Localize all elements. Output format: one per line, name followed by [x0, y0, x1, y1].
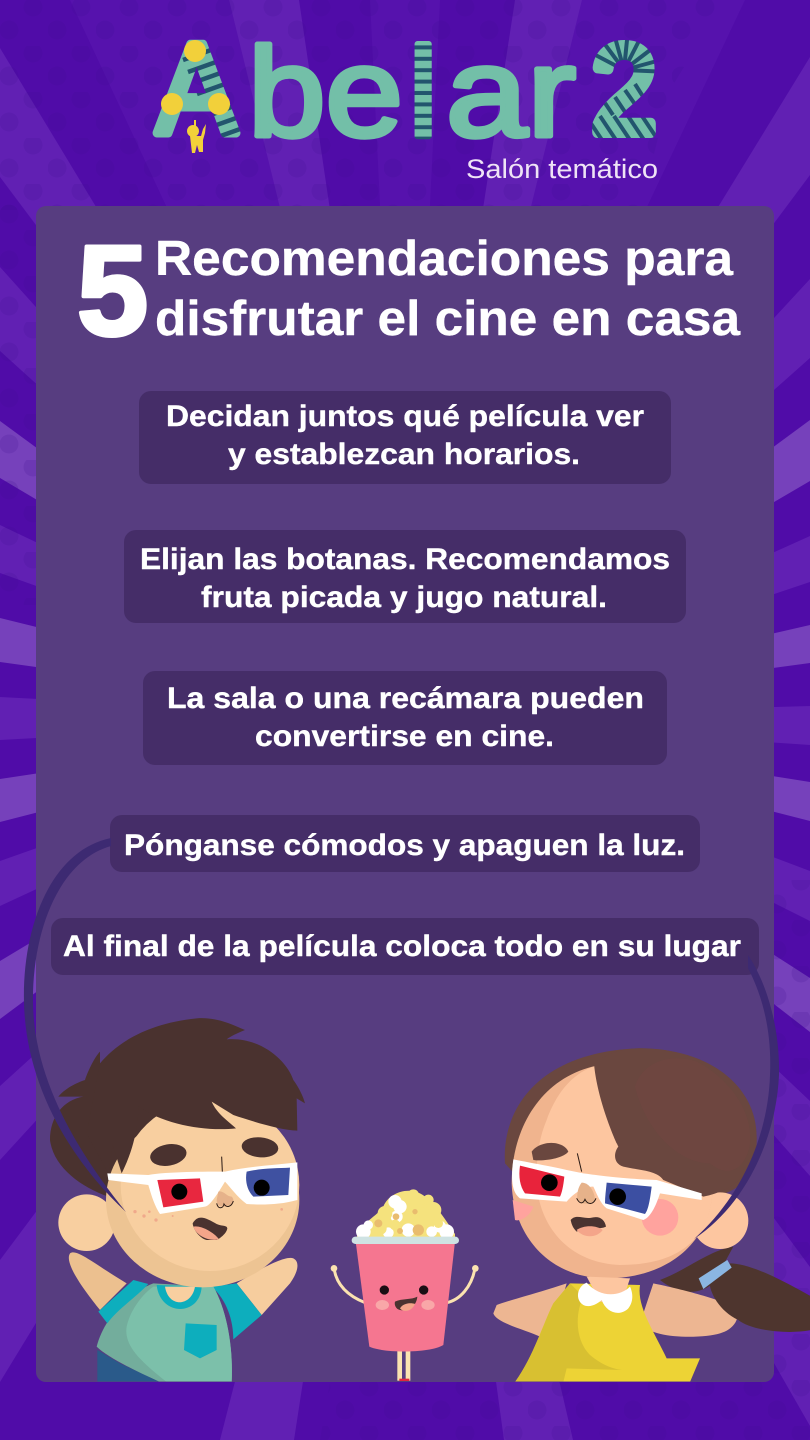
illustration: girl with 3D glasses [493, 1048, 810, 1382]
recommendation 2 [124, 530, 686, 623]
recommendation 1 [139, 391, 671, 484]
icon: yellow dots and hanging figure on the A [161, 40, 230, 153]
recommendation 1: y establezcan horarios. [228, 438, 580, 471]
left connector arc [24, 838, 126, 1212]
logo: Abelar 2 [156, 17, 658, 184]
logo striped letter l: l [409, 21, 437, 163]
title line 1: Recomendaciones para [155, 232, 734, 286]
recommendation 5: Al final de la película coloca todo en su lugar [63, 930, 741, 963]
recommendation 4: Pónganse cómodos y apaguen la luz. [124, 829, 685, 862]
panel: main card [36, 206, 774, 1382]
title [77, 220, 741, 363]
illustration: boy with 3D glasses [50, 1018, 305, 1382]
logo subtitle: Salón temático [466, 154, 658, 184]
recommendation 3 [143, 671, 667, 765]
recommendation 3: convertirse en cine. [255, 720, 554, 753]
logo letter A: A [156, 17, 236, 161]
big number 5: 5 [77, 220, 148, 363]
recommendation 1: Decidan juntos qué película ver [166, 400, 644, 433]
recommendation 2: fruta picada y jugo natural. [201, 581, 607, 614]
recommendation 5 [51, 918, 759, 975]
title line 2: disfrutar el cine en casa [155, 292, 741, 346]
illustration: popcorn bucket character [331, 1189, 479, 1381]
recommendation 2: Elijan las botanas. Recomendamos [140, 543, 670, 576]
recommendation 4 [110, 815, 700, 872]
logo letters ar: ar [446, 21, 576, 163]
logo striped number 2: 2 [592, 22, 656, 160]
recommendation 3: La sala o una recámara pueden [167, 682, 644, 715]
logo letters be: be [248, 21, 403, 163]
right connector arc [694, 955, 779, 1239]
